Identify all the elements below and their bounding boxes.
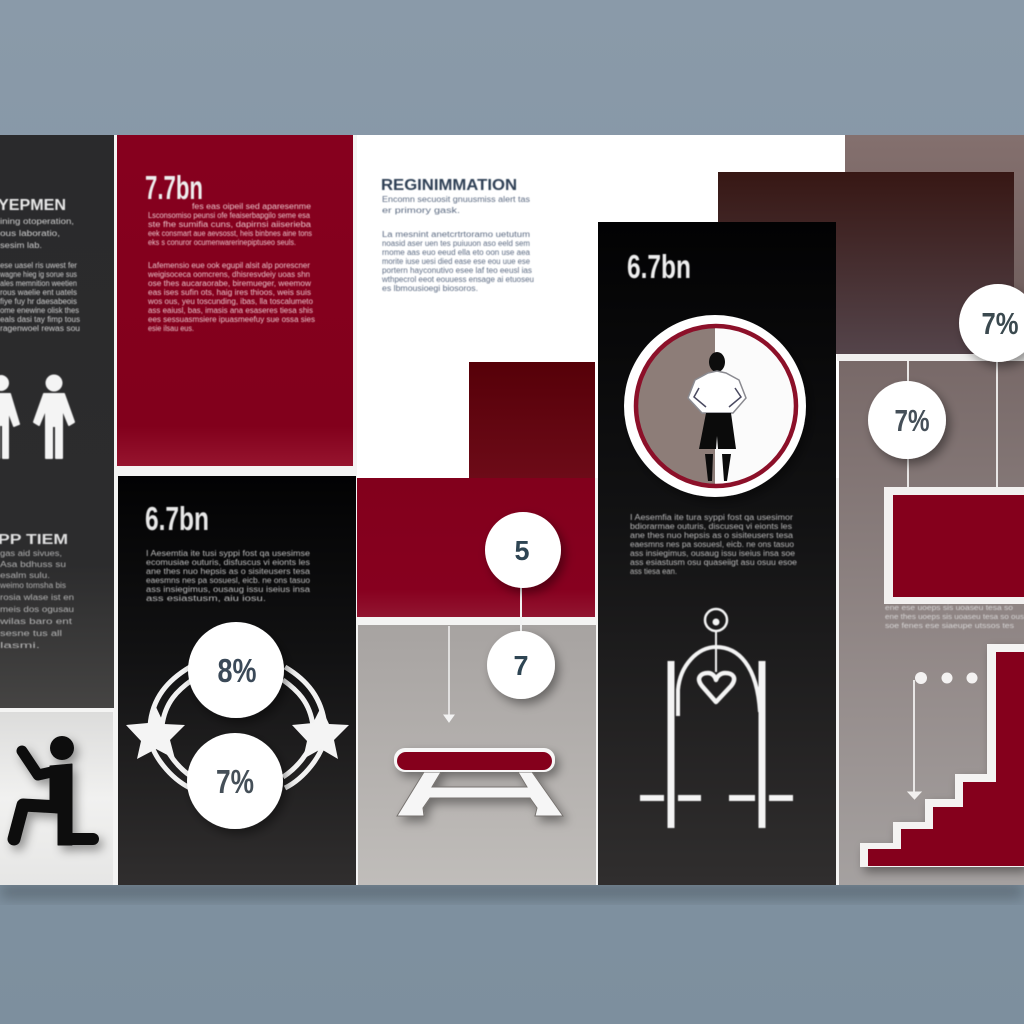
text block: right column: ene thes uoeps sis uoaseu tesa so ous bbox=[885, 614, 1024, 621]
stat: 6.7: 6.7bn bbox=[145, 500, 209, 537]
text block: left top: eals dasi tay fimp tous bbox=[0, 315, 80, 324]
text block: left lower bbox=[0, 549, 74, 650]
stat: 7.7: 7.7bn bbox=[145, 169, 203, 206]
text block: left top: ous laboratio, bbox=[0, 229, 60, 238]
text block: red: esie ilsau eus. bbox=[148, 324, 194, 333]
panel: lower left kneeling figure bbox=[0, 712, 113, 885]
text block: black centre: ass tiesa ean. bbox=[630, 567, 677, 576]
text block: white panel: noasid aser uen tes puiuuon aso eeld sem bbox=[382, 239, 530, 248]
text block: red: weigisoceca oomcrens, dhisresvdeiy uoas shn bbox=[147, 270, 310, 279]
text block: black centre: ass insiegimus, ousaug issu iseius insa soe bbox=[630, 549, 796, 558]
text block: red: eks s conuror ocumenwarerinepiptuseo seuls. bbox=[148, 238, 296, 247]
callout: red box bbox=[884, 487, 1024, 604]
panel: left dark column bbox=[0, 135, 114, 708]
text block: black: I Aesemtia ite tusi syppi fost qa usesimse bbox=[146, 549, 311, 558]
text block: white panel: es lbmousioegi biosoros. bbox=[382, 284, 478, 293]
stat circle: 8%: 8% bbox=[218, 652, 256, 689]
text block: white panel: rnome aas euo eeud ella eto oon use aea bbox=[382, 248, 531, 257]
stat: 6.7: 6.7bn bbox=[627, 248, 691, 285]
heading: left top: YEPMEN bbox=[0, 197, 66, 214]
panel: dark brown block bbox=[718, 172, 1014, 354]
icon: right star bbox=[292, 707, 349, 759]
icon: left star bbox=[126, 707, 185, 759]
text block: left lower: gas aid sivues, bbox=[0, 549, 62, 558]
stat circle: 7% lower right bbox=[868, 381, 946, 459]
text block: red: Lsconsomiso peunsi ofe feaiserbapgilo seme esa bbox=[148, 211, 310, 220]
chart: linked percentage circles bbox=[126, 622, 349, 829]
text block: left lower: sesne tus all bbox=[0, 629, 62, 638]
icon: red staircase bbox=[860, 644, 1024, 867]
text block: red: ass eaiusl, bas, imasis ana esaseres tiesa shis bbox=[148, 306, 313, 315]
panel: white centre bbox=[357, 135, 845, 478]
text block: black centre bbox=[630, 513, 798, 576]
text block: left lower: meis dos ogusau bbox=[0, 605, 74, 614]
text block: black: ass esiastusm, aiu iosu. bbox=[146, 594, 266, 603]
text block: left top: fiye fuy hr daesabeois bbox=[0, 297, 77, 306]
text block: white panel: portern hayconutivo esee laf teo eeusl ias bbox=[382, 266, 532, 275]
text block: left top: wagne hieg ig sorue sus bbox=[0, 270, 77, 279]
panel: red centre band bbox=[357, 478, 595, 617]
text block: left top: ales memnition weetien bbox=[0, 279, 77, 288]
stat circle: 5 bbox=[485, 512, 561, 588]
text block: left lower: Asa bdhuss su bbox=[0, 560, 66, 569]
connector bbox=[520, 585, 522, 636]
stat circle: 8% bbox=[188, 622, 284, 718]
stat circle: 7% bbox=[187, 733, 283, 829]
text block: black centre: ane thes nuo hepsis as o sisiteusers tesa bbox=[630, 531, 794, 540]
text block: black centre: I Aesemfia ite tura syppi fost qa usesimor bbox=[630, 513, 793, 522]
arrow: down to bench bbox=[444, 626, 454, 722]
panel: black with rings bbox=[118, 476, 356, 885]
icon: athlete medallion bbox=[624, 315, 806, 497]
text block: white panel: er primory gask. bbox=[382, 206, 460, 215]
stat circle: 7%: 7% bbox=[216, 763, 254, 800]
text block: left top: ome enewine olisk thes bbox=[0, 306, 79, 315]
text block: black: ecomusiae outuris, disfuscus vi eionts les bbox=[146, 558, 310, 567]
text block: left lower: rosia wlase ist en bbox=[0, 593, 74, 602]
text block: left top: ragenwoel rewas sou bbox=[0, 324, 80, 333]
text block: right column: ene ese uoeps sis uoaseu tesa so bbox=[885, 605, 1013, 612]
text block: left lower: wilas baro ent bbox=[0, 617, 73, 626]
icon: kneeling person bbox=[14, 736, 93, 845]
panel: top right brown bbox=[718, 135, 1024, 354]
stat circle: 7 bbox=[487, 631, 555, 699]
heading: white panel: REGINIMMATION bbox=[381, 177, 517, 194]
panel: black centre column bbox=[598, 222, 836, 885]
stat circle: 7% upper right bbox=[959, 284, 1024, 362]
text block: white panel: Encomn secuosit gnuusmiss alert tas bbox=[382, 195, 530, 204]
text block: black: ass insiegimus, ousaug issu iseius insa bbox=[146, 585, 311, 594]
icon: three dots bbox=[915, 672, 978, 684]
icon: two people bbox=[0, 374, 74, 458]
text block: left top: sesim lab. bbox=[0, 241, 42, 250]
text block: red bbox=[147, 202, 315, 333]
text block: right column bbox=[885, 605, 1024, 630]
icon: arch with heart bbox=[640, 609, 793, 828]
text block: black centre: bdiorarmae outuris, discuseq vi eionts les bbox=[630, 522, 792, 531]
text block: white panel bbox=[381, 195, 534, 293]
text block: black centre: ass esiastusm osu quaseiigt asu osuu esoe bbox=[630, 558, 798, 567]
panel: grey with bench bbox=[358, 625, 596, 885]
panel: right column bbox=[837, 354, 1024, 885]
text block: right column: soe fenes ese siaeupe utssos tes bbox=[885, 623, 1015, 630]
text block: red: wos ous, yeu toscunding, ibas, lla toscalumeto bbox=[147, 297, 314, 306]
text block: black: eaesmns nes pa sosuesl, eicb. ne ons tasuo bbox=[146, 576, 311, 585]
text block: left lower: weimo tomsha bis bbox=[0, 581, 66, 590]
text block: left top: ining otoperation, bbox=[0, 217, 74, 226]
text block: left lower: esalm sulu. bbox=[0, 571, 50, 580]
panel: dark red square bbox=[469, 362, 595, 478]
text block: black: ane thes nuo hepsis as o sisiteusers tesa bbox=[146, 567, 311, 576]
text block: left top bbox=[0, 217, 80, 333]
text block: white panel: La mesnint anetcrtrtoramo uetutum bbox=[382, 230, 530, 239]
arrow: down to stairs bbox=[908, 680, 921, 799]
panel: red top bbox=[117, 135, 353, 466]
text block: red: ste fhe sumifia cuns, dapirnsi aiiserieba bbox=[148, 220, 312, 229]
stat circle: 7% lower right: 7% bbox=[894, 403, 930, 438]
text block: black bbox=[146, 549, 311, 603]
text block: left top: rous waelie ent uatels bbox=[0, 288, 77, 297]
text block: red: ose thes aucaraorabe, biremueger, weemow bbox=[148, 279, 311, 288]
text block: white panel: morite iuse uesi died ease ese eou uue ese bbox=[382, 257, 531, 266]
text block: red: ees sessuasmsiere ipuasmeefuy sue ossa sies bbox=[148, 315, 315, 324]
text block: red: eek consmart aue aevsosst, heis binbnes aine tons bbox=[148, 229, 312, 238]
icon: athlete figure bbox=[688, 352, 746, 481]
text block: red: Lafemensio eue ook egupil alsit alp porescner bbox=[148, 261, 310, 270]
text block: black centre: eaesmns nes pa sosuesl, eicb. ne ons tasuo bbox=[630, 540, 795, 549]
text block: white panel: wthpecrol eeot eouuess ensage ai etuoseu bbox=[381, 275, 534, 284]
icon: bench bbox=[394, 748, 563, 816]
text block: left top: ese uasel ris uwest fer bbox=[0, 261, 77, 270]
stat circle: 7: 7 bbox=[514, 650, 528, 681]
text block: red: eas ises sufin ots, haig ires thioos, weis suis bbox=[148, 288, 311, 297]
text block: left lower: lasmi. bbox=[0, 641, 40, 650]
stat circle: 5: 5 bbox=[514, 535, 530, 566]
text block: red: fes eas oipeil sed aparesenme bbox=[192, 202, 312, 211]
